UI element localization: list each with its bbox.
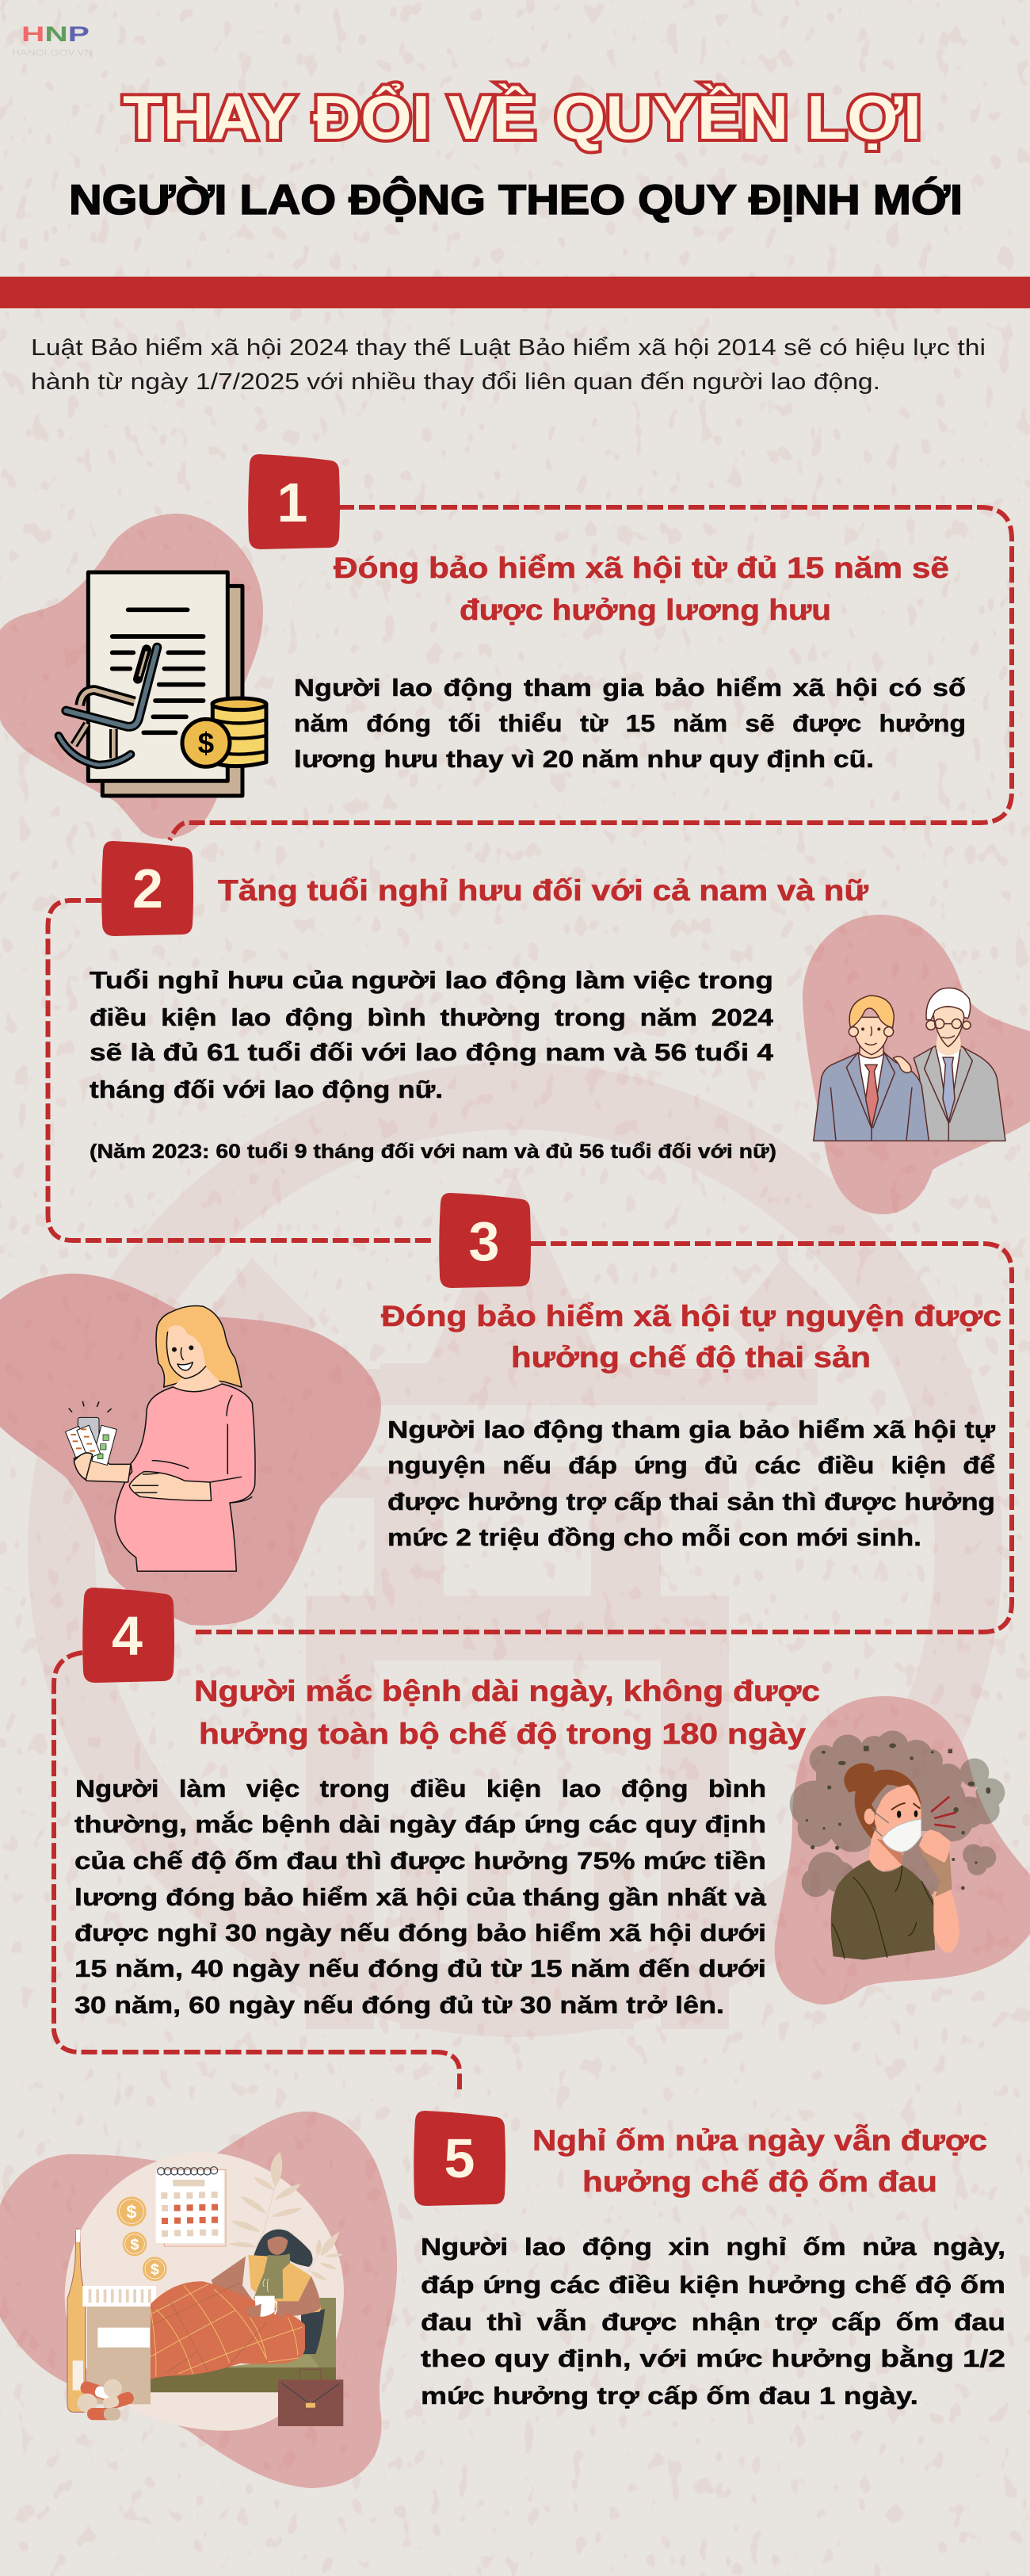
- badge 1: 1: [277, 472, 307, 533]
- badge 2: [101, 841, 193, 936]
- body 4: 30 năm, 60 ngày nếu đóng đủ từ 30 năm trở lên.: [74, 1991, 724, 2019]
- body 1: [294, 674, 966, 773]
- intro text: Luật Bảo hiểm xã hội 2024 thay thế Luật Bảo hiểm xã hội 2014 sẽ có hiệu lực thi: [31, 335, 986, 361]
- illustration: woman in bed with medicine and calendar: $: [131, 2237, 139, 2253]
- body 4: lương đóng bảo hiểm xã hội của tháng gần nhất và: [74, 1883, 767, 1911]
- heading 3: [381, 1300, 1001, 1374]
- heading 5: [532, 2124, 987, 2198]
- body 4: của chế độ ốm đau thì được hưởng 75% mức tiền: [74, 1847, 766, 1875]
- body 5: [421, 2233, 1005, 2410]
- illustration: woman in bed with medicine and calendar: [65, 2152, 344, 2431]
- body 4: Người làm việc trong điều kiện lao động bình: [75, 1775, 766, 1802]
- heading 1: được hưởng lương hưu: [460, 594, 831, 626]
- heading 1: Đóng bảo hiểm xã hội từ đủ 15 năm sẽ: [334, 552, 949, 584]
- heading 4: hưởng toàn bộ chế độ trong 180 ngày: [199, 1718, 806, 1750]
- body 2: điều kiện lao động bình thường trong năm 2024: [90, 1003, 774, 1031]
- body 3: [387, 1416, 996, 1551]
- body 2: sẽ là đủ 61 tuổi đối với lao động nam và 56 tuổi 4: [90, 1038, 774, 1066]
- note: 2023 figures: (Năm 2023: 60 tuổi 9 tháng đối với nam và đủ 56 tuổi đối với nữ): [90, 1141, 776, 1163]
- subtitle: NGƯỜI LAO ĐỘNG THEO QUY ĐỊNH MỚI: [69, 175, 963, 224]
- body 2: [90, 966, 774, 1103]
- badge 4: [82, 1588, 174, 1683]
- body 1: lương hưu thay vì 20 năm như quy định cũ.: [294, 745, 874, 773]
- red divider bar: [0, 277, 1030, 308]
- badge 5: [414, 2111, 505, 2206]
- body 3: mức 2 triệu đồng cho mỗi con mới sinh.: [387, 1523, 921, 1551]
- illustration: pregnant woman with pills: [65, 1305, 255, 1571]
- badge 2: 2: [132, 858, 163, 919]
- panel 5: half-day sick leave: [65, 2111, 1005, 2431]
- body 3: nguyện nếu đáp ứng đủ các điều kiện để: [387, 1451, 995, 1479]
- body 4: thường, mắc bệnh dài ngày đáp ứng các quy định: [74, 1810, 766, 1838]
- illustration: woman in bed with medicine and calendar: $: [126, 2201, 136, 2222]
- heading 1: [334, 552, 949, 626]
- logo: HNP: HANOI.GOV.VN: [12, 48, 93, 58]
- body 5: mức hưởng trợ cấp ốm đau 1 ngày.: [421, 2382, 918, 2410]
- illustration: woman in bed with medicine and calendar: $: [151, 2262, 159, 2279]
- panel 2: higher retirement age: [48, 841, 1005, 1240]
- body 4: được nghỉ 30 ngày nếu đóng bảo hiểm xã hội dưới: [74, 1919, 766, 1947]
- heading 3: Đóng bảo hiểm xã hội tự nguyện được: [381, 1300, 1001, 1332]
- icon: document, rocking chair and coins: [59, 572, 266, 796]
- heading 2: Tăng tuổi nghỉ hưu đối với cả nam và nữ: [218, 874, 868, 907]
- heading 4: [194, 1674, 820, 1750]
- badge 4: 4: [112, 1605, 143, 1667]
- watermark: Hanoi emblem: [28, 1062, 1002, 2037]
- title: THAY ĐỔI VỀ QUYỀN LỢI: [123, 82, 921, 152]
- body 5: đau thì vẫn được nhận trợ cấp ốm đau: [421, 2308, 1005, 2336]
- body 3: được hưởng trợ cấp thai sản thì được hưởng: [387, 1488, 995, 1515]
- badge 3: [439, 1193, 531, 1288]
- icon: document, rocking chair and coins: $: [198, 727, 214, 759]
- heading 3: hưởng chế độ thai sản: [511, 1341, 871, 1374]
- body 1: Người lao động tham gia bảo hiểm xã hội có số: [294, 674, 966, 701]
- illustration: coughing woman with mask: [790, 1730, 1005, 1960]
- illustration: two men in suits: [814, 988, 1005, 1141]
- intro text: [31, 335, 986, 395]
- intro text: hành từ ngày 1/7/2025 với nhiều thay đổi liên quan đến người lao động.: [31, 369, 880, 395]
- body 5: theo quy định, với mức hưởng bằng 1/2: [421, 2344, 1005, 2372]
- panel 1: pension after 15 years: [59, 454, 1012, 840]
- body 4: 15 năm, 40 ngày nếu đóng đủ từ 15 năm đến dưới: [74, 1955, 766, 1982]
- body 1: năm đóng tối thiểu từ 15 năm sẽ được hưởng: [294, 709, 966, 737]
- badge 5: 5: [444, 2127, 475, 2189]
- pink blobs behind illustrations: [0, 514, 1030, 2488]
- heading 4: Người mắc bệnh dài ngày, không được: [194, 1674, 820, 1707]
- logo: HNP: [12, 22, 93, 58]
- body 5: đáp ứng các điều kiện hưởng chế độ ốm: [421, 2271, 1005, 2299]
- heading 5: Nghỉ ốm nửa ngày vẫn được: [532, 2124, 987, 2157]
- logo: HNP: H N P: [21, 22, 90, 46]
- panel 4: long-term illness: [54, 1588, 1005, 2093]
- body 3: Người lao động tham gia bảo hiểm xã hội tự: [387, 1416, 996, 1443]
- body 2: Tuổi nghỉ hưu của người lao động làm việc trong: [90, 966, 773, 994]
- panel 3: voluntary insurance maternity: [65, 1193, 1012, 1632]
- badge 1: [248, 454, 340, 549]
- badge 3: 3: [469, 1210, 499, 1272]
- body 5: Người lao động xin nghỉ ốm nửa ngày,: [421, 2233, 1005, 2261]
- heading 5: hưởng chế độ ốm đau: [582, 2165, 937, 2198]
- body 2: tháng đối với lao động nữ.: [90, 1076, 443, 1103]
- body 4: [74, 1775, 767, 2019]
